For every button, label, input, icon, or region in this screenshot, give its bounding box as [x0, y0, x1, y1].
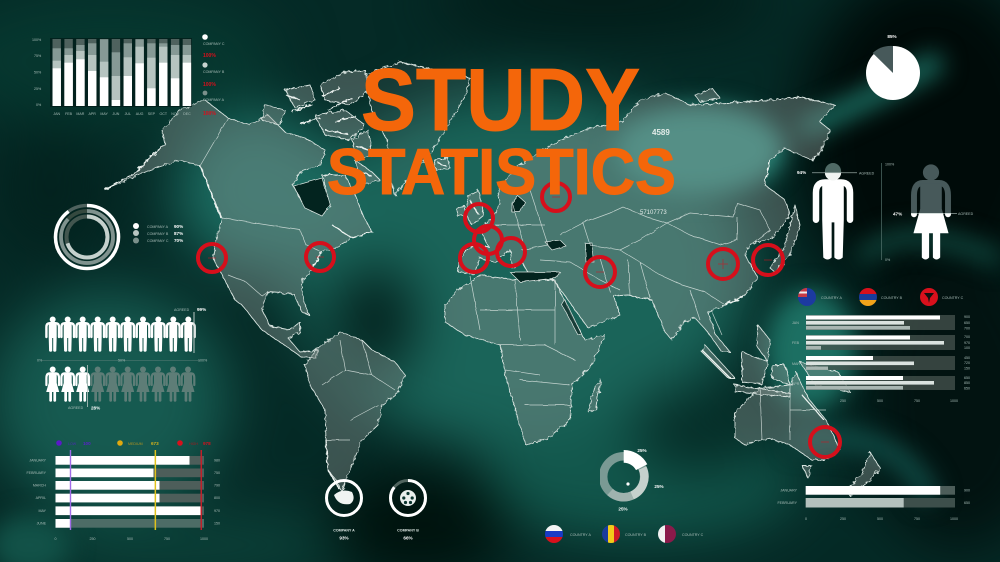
pictogram: female row 28%: [46, 365, 195, 410]
stacked bar chart: top left: JUL: [125, 112, 131, 116]
eurasia: [458, 93, 835, 352]
stacked bar chart: top left: SEP: [148, 112, 156, 116]
pictogram: male row 99%: 100%: [198, 358, 208, 362]
grouped bar chart: right: 450: [964, 356, 970, 360]
radial chart legend: COMPANY C: [147, 239, 169, 243]
horizontal bar chart: bottom left: MAY: [38, 509, 47, 513]
stacked bar chart: top left: 25%: [34, 87, 42, 91]
bar chart: bottom right: 900: [964, 488, 970, 492]
inland seas: [294, 178, 594, 335]
grouped bar chart: right: JAN: [792, 321, 799, 325]
bar chart: bottom right: JANUARY: [780, 488, 798, 492]
bar chart: bottom right: 1000: [950, 517, 958, 521]
south america: [305, 332, 405, 492]
stacked bar chart: top left: 100%: [32, 38, 42, 42]
stacked bar chart: top left: MAR: [76, 112, 85, 116]
bar chart legend: [56, 440, 211, 446]
madagascar: [588, 380, 601, 412]
horizontal bar chart: bottom left: 250: [90, 537, 96, 541]
bar chart: bottom right: FEBRUARY: [777, 501, 798, 505]
grouped bar chart: right: FEB: [792, 341, 800, 345]
horizontal bar chart: bottom left: 800: [214, 496, 220, 500]
stacked bar chart: top left: [32, 38, 192, 116]
map value: 4589: 4589: [652, 128, 670, 137]
grouped bar chart: right: 970: [964, 341, 970, 345]
grouped bar chart: right: 900: [964, 315, 970, 319]
horizontal bar chart: bottom left: FEBRUARY: [26, 471, 47, 475]
company B ring: 66%: [403, 536, 413, 540]
horizontal bar chart: bottom left: 790: [214, 484, 220, 488]
pictogram: male row 99%: [37, 307, 208, 362]
radial chart legend: 70%: [174, 238, 183, 243]
greenland: [365, 62, 470, 195]
grouped bar chart: right: 250: [840, 399, 846, 403]
crinkled coastlines: [105, 88, 824, 490]
grouped bar chart: right: [792, 315, 970, 403]
title line: STUDY: STUDY: [361, 50, 640, 149]
grouped bar chart: right: 750: [914, 399, 920, 403]
horizontal bar chart: bottom left: 750: [164, 537, 170, 541]
arctic islands: [285, 85, 315, 108]
stacked bar chart: top left: JAN: [53, 112, 60, 116]
stacked bar chart: top left: AUG: [136, 112, 144, 116]
company A ring: COMPANY A: [333, 528, 355, 532]
map value: 57107773: 57107773: [640, 210, 667, 216]
radial chart legend: [133, 223, 183, 244]
pictogram: female row 28%: AGREED: [68, 406, 84, 410]
title: [327, 50, 676, 208]
stacked bar legend: COMPANY C: [203, 42, 225, 46]
radial chart legend: COMPANY B: [147, 232, 169, 236]
bar chart: bottom right: 500: [877, 517, 883, 521]
bar chart legend: 673: [151, 441, 159, 446]
company A ring: [326, 480, 362, 540]
stacked bar chart: top left: 50%: [34, 70, 42, 74]
grouped bar chart: right: 700: [964, 335, 970, 339]
pie chart 85%: 85%: [887, 34, 897, 39]
iceland, uk, ireland: [434, 158, 450, 170]
bar chart: bottom right: 650: [964, 501, 970, 505]
horizontal bar chart: bottom left: 750: [214, 471, 220, 475]
radial chart legend: COMPANY A: [147, 225, 169, 229]
grouped bar chart: right: 1000: [950, 399, 958, 403]
donut chart: 25%: [618, 506, 628, 512]
grouped bar chart: right: 500: [877, 399, 883, 403]
stacked bar chart: top left: JUN: [112, 112, 120, 116]
flag legend: right: COUNTRY A: [821, 296, 842, 300]
grouped bar chart: right: 650: [964, 321, 970, 325]
horizontal bar chart: bottom left: [26, 440, 220, 541]
australia: [735, 372, 840, 460]
horizontal bar chart: bottom left: JUNE: [37, 522, 47, 526]
bar chart: bottom right: [777, 486, 970, 521]
radial progress chart: [56, 206, 118, 268]
bar chart legend: 978: [203, 441, 211, 446]
large female figure: AGREED: [958, 212, 974, 216]
grouped bar chart: right: MAR: [792, 362, 800, 366]
large male figure: 94%: [797, 170, 806, 175]
map figures: [640, 128, 670, 216]
bar chart legend: MEDIUM: [128, 442, 143, 446]
bar chart: bottom right: 250: [840, 517, 846, 521]
stacked bar legend: 100%: [203, 53, 216, 59]
bar chart: bottom right: 0: [805, 517, 807, 521]
stacked bar chart: top left: OCT: [160, 112, 168, 116]
company B ring: [390, 480, 426, 540]
bar chart: bottom right: 750: [914, 517, 920, 521]
title line: STATISTICS: STATISTICS: [327, 135, 676, 208]
grouped bar chart: right: 650: [964, 386, 970, 390]
flag legend: right: COUNTRY C: [942, 296, 964, 300]
country borders: [200, 118, 826, 440]
pictogram: male row 99%: 50%: [118, 358, 126, 362]
bar chart legend: LOW: [68, 442, 77, 446]
stacked bar chart: top left: 75%: [34, 54, 42, 58]
vertical scale: 100%: [885, 162, 895, 166]
radial chart legend: 87%: [174, 231, 183, 236]
grouped bar chart: right: 150: [964, 366, 970, 370]
company B ring: COMPANY B: [397, 528, 419, 532]
red location circles: [198, 183, 840, 457]
stacked bar legend: 100%: [203, 82, 216, 88]
horizontal bar chart: bottom left: 1000: [200, 537, 208, 541]
flag legend: bottom center: [545, 525, 704, 543]
bar chart legend: HIGH: [189, 442, 198, 446]
stacked bar legend: COMPANY B: [203, 70, 225, 74]
large male figure: [797, 163, 875, 260]
large female figure: [893, 164, 974, 260]
horizontal bar chart: bottom left: 500: [127, 537, 133, 541]
africa: [445, 275, 605, 445]
flag legend: right: COUNTRY B: [881, 296, 903, 300]
stacked bar chart: top left: 0%: [36, 103, 42, 107]
bar chart legend: 100: [83, 441, 91, 446]
grouped bar chart: right: 720: [964, 361, 970, 365]
pictogram: female row 28%: 28%: [91, 406, 100, 410]
company A ring: 93%: [339, 536, 349, 540]
stacked bar legend: 100%: [203, 111, 216, 117]
large male figure: AGREED: [859, 172, 875, 176]
vertical scale: [881, 162, 895, 262]
pictogram: male row 99%: 0%: [37, 358, 43, 362]
vertical scale: 0%: [885, 258, 891, 262]
horizontal bar chart: bottom left: 0: [54, 537, 56, 541]
horizontal bar chart: bottom left: JANUARY: [29, 458, 47, 462]
stacked bar chart: top left: FEB: [65, 112, 73, 116]
flag legend: bottom center: COUNTRY A: [570, 533, 591, 537]
world map: [105, 62, 880, 496]
horizontal bar chart: bottom left: 970: [214, 509, 220, 513]
horizontal bar chart: bottom left: APRIL: [36, 496, 46, 500]
donut chart: [603, 448, 664, 512]
stacked bar chart: top left: DEC: [183, 112, 191, 116]
stacked bar legend: [202, 34, 225, 117]
japan, philippines, indonesia: [770, 205, 800, 272]
grouped bar chart: right: 850: [964, 381, 970, 385]
pie chart 85%: [866, 34, 920, 100]
stacked bar legend: COMPANY A: [203, 98, 225, 102]
pictogram: male row 99%: 99%: [197, 307, 206, 312]
flag legend: bottom center: COUNTRY B: [625, 533, 647, 537]
stacked bar chart: top left: NOV: [171, 112, 180, 116]
flag legend: bottom center: COUNTRY C: [682, 533, 704, 537]
grouped bar chart: right: APR: [792, 382, 800, 386]
tasmania, new zealand: [802, 466, 812, 478]
grouped bar chart: right: 700: [964, 326, 970, 330]
horizontal bar chart: bottom left: 150: [214, 522, 220, 526]
large female figure: 47%: [893, 212, 902, 216]
pictogram: male row 99%: AGREED: [174, 308, 190, 312]
stacked bar chart: top left: APR: [89, 112, 96, 116]
stacked bar chart: top left: MAY: [100, 112, 108, 116]
donut chart: 25%: [637, 448, 647, 453]
donut chart: 25%: [654, 484, 664, 489]
horizontal bar chart: bottom left: 980: [214, 458, 220, 462]
horizontal bar chart: bottom left: MARCH: [33, 484, 46, 488]
radial chart legend: 90%: [174, 224, 183, 229]
flag legend: right: [798, 288, 964, 306]
north america: [105, 100, 372, 358]
grouped bar chart: right: 650: [964, 376, 970, 380]
grouped bar chart: right: 100: [964, 346, 970, 350]
